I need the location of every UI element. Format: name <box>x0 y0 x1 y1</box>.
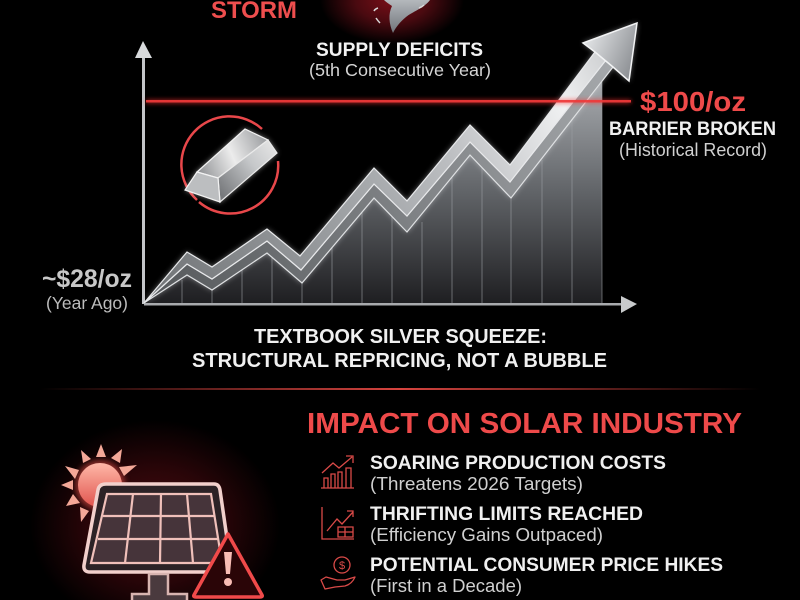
arrow head <box>583 23 637 81</box>
panel <box>84 484 231 572</box>
text: silver squeeze conclusion: TEXTBOOK SILVER SQUEEZE: <box>254 326 547 348</box>
label: $28/oz year ago: (Year Ago) <box>46 293 128 313</box>
text: supply deficits: (5th Consecutive Year) <box>309 60 491 80</box>
reference line: $100 barrier <box>146 100 631 103</box>
heading: impact on solar industry: IMPACT ON SOLAR INDUSTRY <box>307 408 742 440</box>
item: thrifting limits reached: (Efficiency Gains Outpaced) <box>370 525 603 545</box>
axis: x <box>144 296 637 313</box>
text: supply deficits: SUPPLY DEFICITS <box>316 39 483 61</box>
item: soaring production costs: SOARING PRODUCTION COSTS <box>370 452 666 474</box>
warning triangle <box>194 534 262 597</box>
item: thrifting limits reached <box>322 503 643 545</box>
upper band <box>144 52 606 303</box>
icon: silver bar in red ring <box>181 116 278 214</box>
item: soaring production costs: (Threatens 2026 Targets) <box>370 474 583 494</box>
label: $100/oz barrier broken: BARRIER BROKEN <box>609 118 776 140</box>
item: potential consumer price hikes: POTENTIAL CONSUMER PRICE HIKES <box>370 554 723 576</box>
chart area fill <box>144 82 602 304</box>
item: soaring production costs <box>321 452 666 494</box>
item: thrifting limits reached: THRIFTING LIMITS REACHED <box>370 503 643 525</box>
line chart: silver price <box>135 23 637 313</box>
icon: tornado <box>320 0 464 44</box>
stand <box>132 574 187 600</box>
label: $100/oz barrier broken <box>609 86 776 160</box>
label: $100/oz barrier broken: $100/oz <box>640 86 746 117</box>
icon: rising bars <box>321 456 354 488</box>
label: $28/oz year ago <box>42 265 132 313</box>
icon: hand with dollar coin <box>321 557 355 589</box>
icon: hand with dollar coin: $ <box>339 560 345 572</box>
text: silver squeeze conclusion <box>192 326 607 372</box>
axis: y <box>135 41 152 304</box>
sun <box>61 444 137 522</box>
list: impact items <box>321 452 723 596</box>
chart column lines <box>182 82 602 304</box>
icon: solar panel with warning <box>30 420 280 600</box>
rising arrow ribbon <box>144 23 637 303</box>
text: supply deficits <box>309 39 491 80</box>
label: $100/oz barrier broken: (Historical Record) <box>619 140 767 160</box>
lower band <box>144 60 613 303</box>
text: silver squeeze conclusion: STRUCTURAL REPRICING, NOT A BUBBLE <box>192 350 607 372</box>
item: potential consumer price hikes <box>321 554 723 596</box>
icon: chart with coins <box>322 507 354 539</box>
item: potential consumer price hikes: (First in a Decade) <box>370 576 522 596</box>
label: $28/oz year ago: ~$28/oz <box>42 265 132 293</box>
